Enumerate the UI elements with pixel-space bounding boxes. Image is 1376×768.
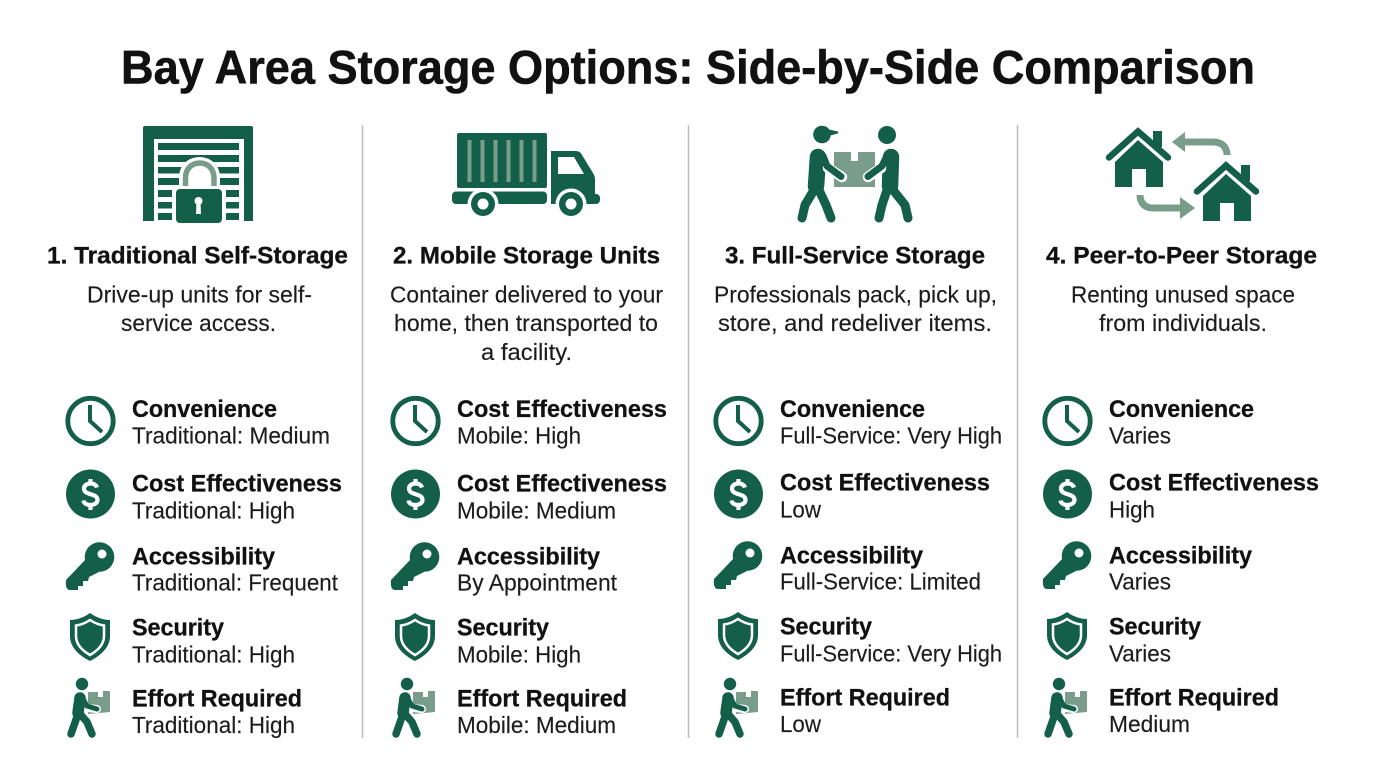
rating: effort required: Low [780,711,821,737]
rating: accessibility: By Appointment [457,569,618,595]
rating: convenience [68,396,330,448]
icon: two movers carrying a box [802,126,908,218]
heading: option 1: 1. Traditional Self-Storage [47,242,348,269]
description: option 4 [1071,282,1295,336]
heading: option 4: 4. Peer-to-Peer Storage [1046,242,1317,269]
rating: cost effectiveness: Cost Effectiveness [457,396,667,423]
icon: garage door with padlock [143,126,253,226]
rating: convenience [716,396,1002,448]
rating: accessibility [714,541,981,594]
rating: cost effectiveness: Cost Effectiveness [457,471,667,498]
rating: cost effectiveness: Low [780,496,821,522]
rating: effort required: Traditional: High [132,712,295,738]
rating: security: Security [457,614,549,642]
description: option 2: home, then transported to [394,310,658,336]
panel: traditional self-storage [47,126,348,738]
rating: cost effectiveness: Cost Effectiveness [1109,470,1319,497]
rating: cost effectiveness: Traditional: High [132,497,295,523]
panel: peer-to-peer storage [1043,131,1319,737]
rating: accessibility: Accessibility [1109,542,1252,570]
rating: effort required [396,678,627,738]
rating: effort required: Effort Required [1109,684,1279,712]
description: option 2: a facility. [481,339,572,365]
rating: convenience: Convenience [132,396,277,423]
rating: effort required [719,678,950,737]
description: option 1: Drive-up units for self- [87,282,312,308]
description: option 4: from individuals. [1099,310,1267,336]
rating: accessibility: Full-Service: Limited [780,568,981,594]
rating: security [718,612,1002,667]
icon: two houses exchanging arrows [1109,131,1256,221]
rating: accessibility [66,542,339,595]
panel: full-service storage [714,126,1002,737]
rating: convenience: Varies [1109,422,1171,448]
title: Bay Area Storage Options: Side-by-Side Comparison [121,42,1255,94]
description: option 3: Professionals pack, pick up, [714,282,997,308]
rating: effort required: Mobile: Medium [457,712,616,738]
rating: cost effectiveness: Mobile: High [457,422,581,448]
rating: cost effectiveness [391,470,667,523]
rating: cost effectiveness [1043,470,1319,522]
rating: cost effectiveness [66,470,342,523]
rating: security: Full-Service: Very High [780,641,1002,667]
rating: effort required: Effort Required [132,686,302,712]
description: option 3 [714,282,997,336]
panel: mobile storage units [390,133,667,738]
icon: delivery truck [452,133,600,220]
rating: effort required: Effort Required [457,686,627,712]
rating: accessibility: Traditional: Frequent [132,569,339,595]
rating: accessibility: Accessibility [457,544,600,570]
rating: convenience: Full-Service: Very High [780,422,1002,448]
rating: security [395,613,581,668]
rating: cost effectiveness [714,470,990,522]
rating: security: Mobile: High [457,642,581,668]
rating: cost effectiveness [393,396,667,448]
heading: option 2: 2. Mobile Storage Units [393,242,660,269]
rating: accessibility: Accessibility [780,542,923,570]
rating: cost effectiveness: Cost Effectiveness [132,471,342,498]
heading: option 3: 3. Full-Service Storage [725,242,985,269]
rating: security [1047,612,1201,667]
rating: convenience: Convenience [780,396,925,423]
description: option 1 [87,282,312,336]
description: option 2: Container delivered to your [390,282,663,308]
rating: effort required: Effort Required [780,684,950,712]
rating: security: Security [780,614,872,640]
rating: security: Traditional: High [132,642,295,668]
rating: cost effectiveness: High [1109,496,1155,522]
rating: security: Security [1109,614,1201,640]
rating: convenience [1045,396,1254,448]
rating: accessibility: Accessibility [132,544,275,570]
rating: effort required: Medium [1109,711,1190,737]
rating: security: Varies [1109,641,1171,667]
rating: effort required [71,678,302,738]
rating: accessibility [1043,541,1252,594]
rating: accessibility: Varies [1109,568,1171,594]
rating: security [70,613,295,668]
rating: cost effectiveness: Mobile: Medium [457,497,616,523]
description: option 4: Renting unused space [1071,282,1295,308]
rating: accessibility [391,542,618,595]
rating: effort required [1048,678,1279,737]
description: option 3: store, and redeliver items. [718,310,992,336]
rating: convenience: Traditional: Medium [132,422,330,448]
rating: security: Security [132,614,224,642]
rating: convenience: Convenience [1109,396,1254,423]
rating: cost effectiveness: Cost Effectiveness [780,470,990,497]
description: option 1: service access. [121,310,276,336]
description: option 2 [390,282,663,365]
